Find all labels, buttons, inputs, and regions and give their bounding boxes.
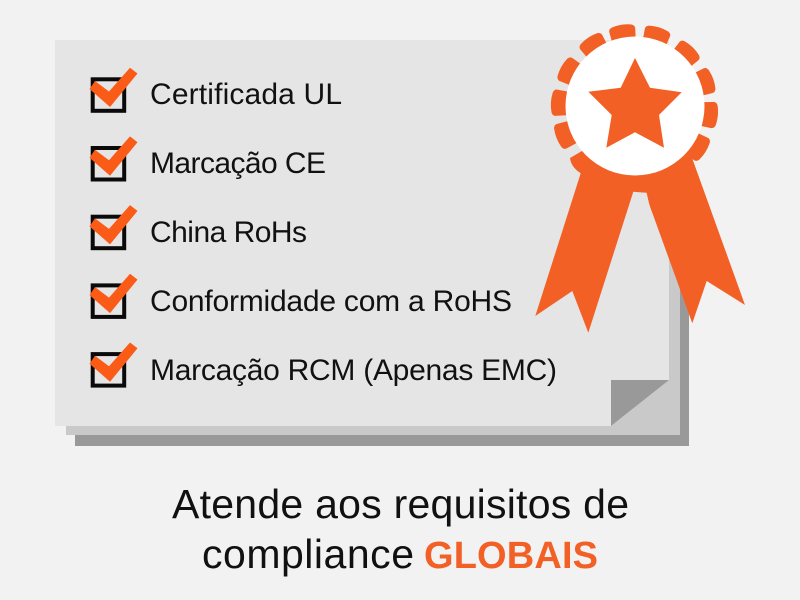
caption [172, 481, 629, 577]
folded page corner [611, 380, 669, 426]
item: China RoHs: China RoHs [150, 216, 307, 249]
icon: award rosette with ribbons [535, 23, 745, 333]
caption: Atende aos requisitos de [172, 481, 629, 527]
item: Marcação CE [90, 136, 326, 180]
white medallion [566, 36, 704, 176]
highlighted word: GLOBAIS [424, 535, 598, 577]
caption: compliance [202, 531, 414, 577]
item: Marcação RCM (Apenas EMC): Marcação RCM (Apenas EMC) [150, 354, 557, 387]
item: Certificada UL: Certificada UL [150, 78, 342, 111]
panel: stacked paper certificate [55, 40, 689, 446]
ribbon tails [535, 120, 745, 333]
star [588, 58, 682, 148]
item: Marcação CE: Marcação CE [150, 147, 326, 180]
checklist [90, 68, 557, 387]
item: Conformidade com a RoHS [90, 274, 512, 318]
item: Marcação RCM (Apenas EMC) [90, 342, 557, 387]
item: China RoHs [90, 205, 307, 249]
item: Certificada UL [90, 68, 342, 111]
item: Conformidade com a RoHS: Conformidade com a RoHS [150, 285, 512, 318]
rosette petals [550, 23, 719, 163]
